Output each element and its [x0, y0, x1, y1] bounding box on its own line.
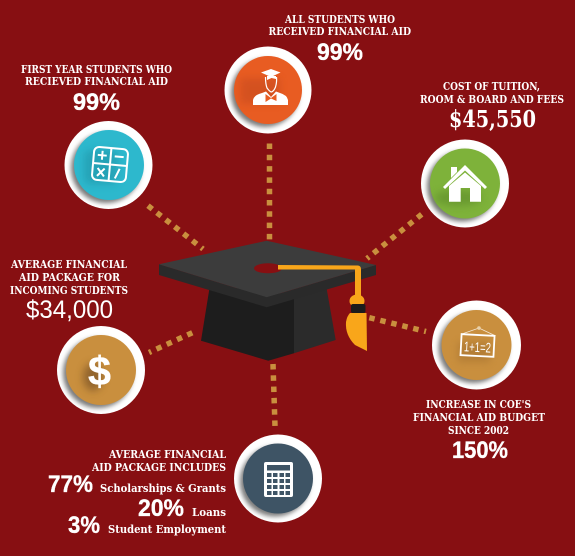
stat: 77% scholarships: [48, 471, 226, 498]
stat: 77% scholarships: 77%: [48, 471, 93, 498]
heading: average aid package: AVERAGE FINANCIAL: [10, 258, 127, 271]
icon: chalkboard: 1+1=2: [464, 338, 491, 356]
stat: 3% student employment: 3%: [68, 512, 100, 539]
panel: increase in budget: [413, 300, 545, 464]
icon: dollar: $: [88, 348, 111, 394]
stat: $45,550: $45,550: [449, 106, 536, 133]
panel: cost of tuition: [420, 80, 564, 228]
dotted connectors: [148, 144, 426, 426]
heading: increase in budget: [413, 398, 545, 437]
icon: calculator: [234, 434, 322, 522]
heading: package includes: AVERAGE FINANCIAL: [108, 448, 226, 461]
stat: 20% loans: 20%: [138, 495, 184, 522]
icon: dollar: [57, 326, 145, 414]
heading: cost of tuition: [420, 80, 564, 106]
stat: 20% loans: [138, 495, 226, 522]
heading: increase in budget: SINCE 2002: [448, 424, 509, 437]
stat: 77% scholarships: Scholarships & Grants: [100, 482, 226, 495]
heading: first year students: [21, 63, 172, 88]
icon: chalkboard: [432, 300, 521, 390]
heading: average aid package: [10, 258, 128, 297]
icon: house: [421, 140, 509, 228]
heading: average aid package: AID PACKAGE FOR: [18, 271, 121, 284]
tassel: [278, 265, 367, 351]
heading: average aid package: INCOMING STUDENTS: [10, 284, 128, 297]
heading: all students: ALL STUDENTS WHO: [284, 13, 395, 26]
stat: 99% first year: 99%: [73, 89, 120, 116]
stat: 99% all students: 99%: [317, 39, 363, 66]
heading: increase in budget: INCREASE IN COE'S: [426, 398, 531, 411]
heading: package includes: AID PACKAGE INCLUDES: [91, 461, 226, 474]
stat: 3% student employment: Student Employment: [108, 523, 226, 536]
stat: 20% loans: Loans: [192, 506, 226, 519]
icon: graduate: [224, 46, 312, 134]
graduation cap: [159, 241, 376, 361]
heading: all students: [268, 13, 411, 38]
heading: cost of tuition: COST OF TUITION,: [443, 80, 540, 93]
stat: 150%: 150%: [452, 437, 508, 464]
heading: all students: RECEIVED FINANCIAL AID: [268, 25, 411, 38]
heading: package includes: [91, 448, 226, 474]
panel: average aid package: [10, 258, 145, 414]
heading: first year students: FIRST YEAR STUDENTS WHO: [21, 63, 172, 76]
stat: $34,000: $34,000: [26, 296, 113, 324]
heading: increase in budget: FINANCIAL AID BUDGET: [413, 411, 545, 424]
panel: first year students: [21, 63, 172, 209]
heading: first year students: RECIEVED FINANCIAL AID: [25, 75, 168, 88]
panel: all students: [224, 13, 411, 134]
icon: calculator symbols: [64, 121, 152, 209]
stat: 3% student employment: [68, 512, 226, 539]
panel: package includes: [48, 434, 322, 539]
